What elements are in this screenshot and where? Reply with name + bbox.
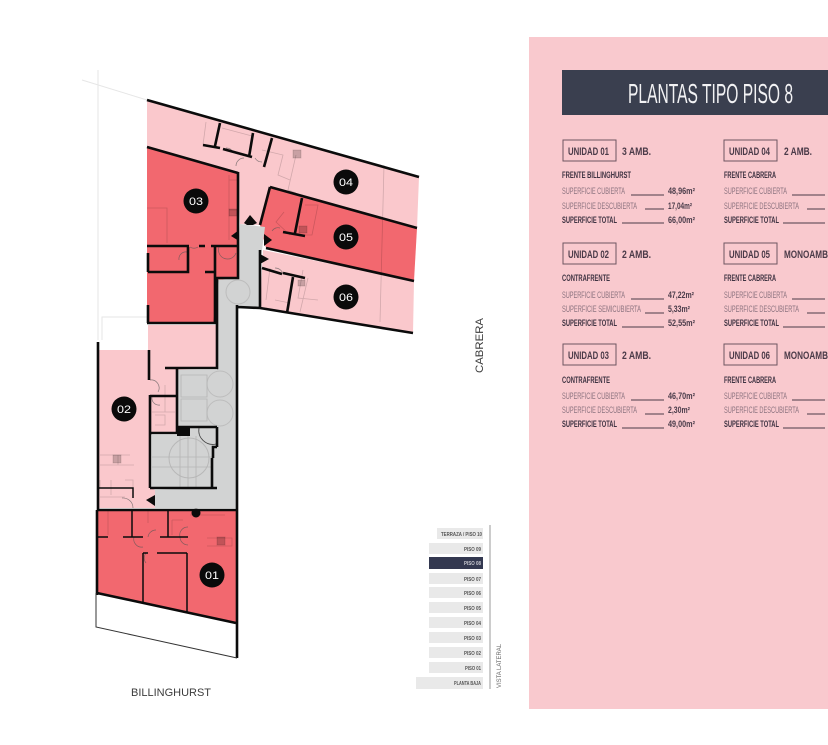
unit 01 data xyxy=(562,140,695,225)
unit 05 data xyxy=(724,243,828,328)
unit 03 data: SUPERFICIE CUBIERTA xyxy=(562,391,625,401)
unit marker 03: 03 xyxy=(189,196,203,208)
unit 06 area xyxy=(260,250,414,333)
door swings xyxy=(122,148,283,563)
unit 02 data: 52,55m² xyxy=(668,318,695,328)
floor selector side view: PLANTA BAJA xyxy=(454,681,481,687)
unit 06 data: SUPERFICIE CUBIERTA xyxy=(724,391,787,401)
unit 03 data xyxy=(562,344,695,429)
unit 02 data: SUPERFICIE TOTAL xyxy=(562,318,617,328)
unit 03 data: 49,00m² xyxy=(668,419,695,429)
unit 01 data: SUPERFICIE CUBIERTA xyxy=(562,186,625,196)
current floor: 08: PISO 08 xyxy=(464,561,481,567)
furniture and fixtures xyxy=(100,122,384,546)
unit marker 06 xyxy=(334,284,358,310)
unit 05 data: SUPERFICIE TOTAL xyxy=(724,318,779,328)
floor selector side view: PISO 04 xyxy=(464,621,481,627)
unit marker 03 xyxy=(184,188,208,214)
unit 05 data: UNIDAD 05 xyxy=(729,249,770,261)
floor selector side view: VISTA LATERAL xyxy=(497,643,503,688)
floor selector side view xyxy=(416,525,503,689)
unit 01 data: 17,04m² xyxy=(668,201,692,211)
circulation core xyxy=(152,224,265,508)
unit 01 data: SUPERFICIE DESCUBIERTA xyxy=(562,201,637,211)
floor selector side view: PISO 02 xyxy=(464,651,481,657)
floor selector side view: PISO 09 xyxy=(464,547,481,553)
unit 01 data: 48,96m² xyxy=(668,186,695,196)
unit 02 data: SUPERFICIE SEMICUBIERTA xyxy=(562,304,641,314)
unit 02 area xyxy=(97,325,217,508)
unit 03 data: 2 AMB. xyxy=(622,350,651,362)
unit 02 data: UNIDAD 02 xyxy=(568,249,609,261)
unit marker 04: 04 xyxy=(339,177,353,189)
unit 03 data: CONTRAFRENTE xyxy=(562,375,610,386)
walls xyxy=(96,100,419,658)
unit 06 data: FRENTE CABRERA xyxy=(724,375,776,386)
unit marker 04 xyxy=(334,170,358,194)
floor selector side view: PISO 06 xyxy=(464,591,481,597)
title bar xyxy=(562,70,828,115)
unit 04 data: FRENTE CABRERA xyxy=(724,170,776,181)
unit marker 01 xyxy=(200,562,224,588)
door arrows xyxy=(146,215,272,518)
unit 01 data: FRENTE BILLINGHURST xyxy=(562,170,631,181)
unit 01 data: UNIDAD 01 xyxy=(568,146,609,158)
unit 03 data: SUPERFICIE DESCUBIERTA xyxy=(562,405,637,415)
unit 06 data: UNIDAD 06 xyxy=(729,350,770,362)
floor selector side view: TERRAZA / PISO 10 xyxy=(441,532,482,538)
unit 02 data: 47,22m² xyxy=(668,290,694,300)
unit 04 data: SUPERFICIE TOTAL xyxy=(724,215,779,225)
unit 03 area xyxy=(147,147,238,323)
unit 03 data: 46,70m² xyxy=(668,391,695,401)
unit 03 data: SUPERFICIE TOTAL xyxy=(562,419,617,429)
unit marker 05 xyxy=(334,224,358,250)
unit marker 06: 06 xyxy=(339,292,353,304)
unit marker 02 xyxy=(112,396,136,422)
unit 05 data: FRENTE CABRERA xyxy=(724,273,776,284)
unit 04 data xyxy=(724,140,825,225)
street label: Cabrera: CABRERA xyxy=(474,317,486,373)
floor selector side view: PISO 07 xyxy=(464,577,481,583)
unit marker 01: 01 xyxy=(205,570,219,582)
unit 02 data: SUPERFICIE CUBIERTA xyxy=(562,290,625,300)
unit 05 area xyxy=(260,187,417,281)
unit 04 data: 2 AMB. xyxy=(784,146,812,158)
unit 01 data: 66,00m² xyxy=(668,215,695,225)
unit 01 area xyxy=(97,510,237,623)
unit 06 data xyxy=(724,344,828,429)
unit 03 data: 2,30m² xyxy=(668,405,690,415)
unit 03 data: UNIDAD 03 xyxy=(568,350,609,362)
unit 02 data: 2 AMB. xyxy=(622,249,651,261)
unit 01 data: 3 AMB. xyxy=(622,146,651,158)
floor selector side view: PISO 03 xyxy=(464,636,481,642)
unit marker 02: 02 xyxy=(117,404,131,416)
unit 04 data: SUPERFICIE CUBIERTA xyxy=(724,186,787,196)
unit marker 05: 05 xyxy=(339,232,353,244)
panel: unit data xyxy=(529,37,828,709)
current floor: 08 xyxy=(429,557,483,569)
unit 04 data: UNIDAD 04 xyxy=(729,146,771,158)
unit 05 data: SUPERFICIE CUBIERTA xyxy=(724,290,787,300)
floor plan xyxy=(82,70,419,658)
unit 06 data: SUPERFICIE TOTAL xyxy=(724,419,779,429)
unit 02 data xyxy=(562,243,695,328)
unit 02 data: CONTRAFRENTE xyxy=(562,273,610,284)
unit 04 area xyxy=(147,100,419,228)
floor selector side view: PISO 05 xyxy=(464,606,481,612)
unit 02 data: 5,33m² xyxy=(668,304,690,314)
unit 01 data: SUPERFICIE TOTAL xyxy=(562,215,617,225)
street label: Billinghurst: BILLINGHURST xyxy=(131,687,211,699)
floor selector side view: PISO 01 xyxy=(465,666,481,672)
